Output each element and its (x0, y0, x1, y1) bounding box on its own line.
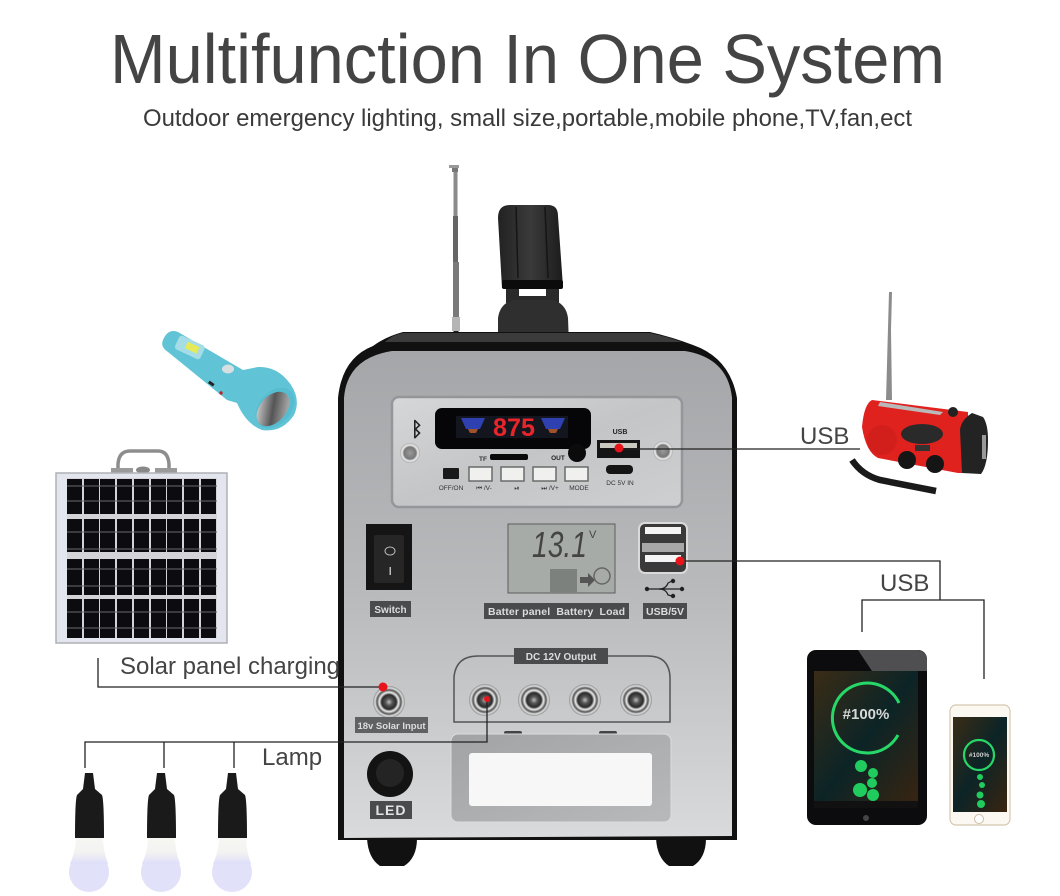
icon: tablet: #100% (843, 706, 889, 723)
panel: main power unit (338, 332, 737, 866)
connector: lamp line (85, 696, 490, 768)
audio out: OUT (551, 455, 565, 462)
label: LED (370, 801, 412, 819)
flashlight window (174, 335, 206, 360)
TF slot: TF (479, 456, 487, 463)
foot left (367, 838, 417, 866)
panel handle (118, 451, 169, 472)
radio antenna (886, 292, 892, 400)
display (435, 408, 591, 449)
DC 12V output group (454, 648, 670, 722)
connector: USB devices line (676, 556, 984, 679)
radio solar strip (878, 402, 943, 415)
radio strap (852, 460, 936, 491)
solar input jack: 18v Solar Input (357, 721, 426, 732)
radio end cap (960, 413, 988, 474)
LCD voltmeter: V (589, 529, 597, 541)
icon: hand crank radio (852, 292, 988, 491)
solar cells (67, 478, 217, 638)
media module (392, 397, 682, 507)
power slide switch (443, 468, 459, 479)
media button labels (439, 485, 589, 492)
title: Multifunction In One System (110, 20, 945, 98)
media button labels: ⏯ (514, 485, 520, 492)
radio tuner dial (901, 424, 943, 444)
label: USB/5V (643, 603, 687, 619)
media buttons (469, 467, 588, 481)
LCD voltmeter (508, 524, 615, 593)
display: 875 (493, 414, 535, 442)
LED lamp panel (451, 731, 671, 822)
connector: solar panel line (98, 658, 388, 692)
radio lamp highlight (982, 435, 986, 459)
label: USB/5V: USB/5V (646, 606, 684, 618)
radio body (862, 400, 968, 473)
micro USB: DC 5V IN (606, 480, 634, 487)
flashlight button (222, 364, 234, 374)
media button labels: OFF/ON (439, 485, 464, 492)
icon: USB trident (645, 579, 684, 598)
label: LED: LED (376, 802, 406, 818)
radio top button (948, 407, 958, 417)
connector: USB radio line (614, 444, 860, 452)
dual USB ports (639, 523, 687, 573)
unit top shading (385, 333, 682, 342)
media button labels: ⏭ /V+ (541, 485, 559, 492)
icon: tablet (807, 650, 927, 825)
TF slot (479, 454, 528, 463)
bulb 3 (212, 773, 252, 892)
panel frame (56, 473, 227, 643)
flashlight body (162, 331, 297, 430)
foot right (656, 838, 706, 866)
icon: smartphone: #100% (969, 752, 989, 759)
label: USB radio: USB (800, 423, 849, 450)
subtitle: Outdoor emergency lighting, small size,portable,mobile phone,TV,fan,ect (143, 105, 912, 132)
label: switch (370, 601, 411, 617)
icon: carrying handle (498, 205, 569, 345)
label: USB devices: USB (880, 570, 929, 597)
label: lamp: Lamp (262, 744, 322, 771)
DC 12V output group: DC 12V Output (526, 652, 597, 663)
icon: flashlight (162, 331, 302, 436)
audio out (551, 444, 586, 462)
LCD voltmeter: 13.1 (532, 524, 587, 565)
icon: telescopic antenna of main unit (449, 165, 460, 342)
label: batter panel battery load: Batter panel Battery Load (488, 606, 625, 618)
radio speaker (867, 425, 897, 455)
bulb 2 (141, 773, 181, 892)
USB port top: USB (613, 429, 627, 436)
media button labels: MODE (569, 485, 589, 492)
screw right (653, 441, 673, 461)
radio knobs (898, 451, 916, 469)
media button labels: ⏮ /V- (476, 485, 492, 492)
LED button (367, 751, 413, 797)
icon: smartphone (950, 705, 1010, 825)
USB port top (597, 429, 640, 458)
rocker switch (366, 524, 412, 590)
unit case (338, 332, 737, 840)
icon: pendant bulbs (69, 773, 252, 892)
radio indicator (915, 445, 930, 451)
label: solar panel charging: Solar panel charging (120, 653, 340, 680)
flashlight reflector (248, 380, 302, 436)
icon: bluetooth: ᛒ (411, 419, 423, 441)
screw left (400, 443, 420, 463)
icon: solar panel (56, 451, 227, 643)
solar input jack (355, 686, 428, 733)
label: switch: Switch (374, 605, 407, 616)
unit silver face (344, 351, 732, 838)
micro USB (606, 465, 634, 487)
bulb 1 (69, 773, 109, 892)
